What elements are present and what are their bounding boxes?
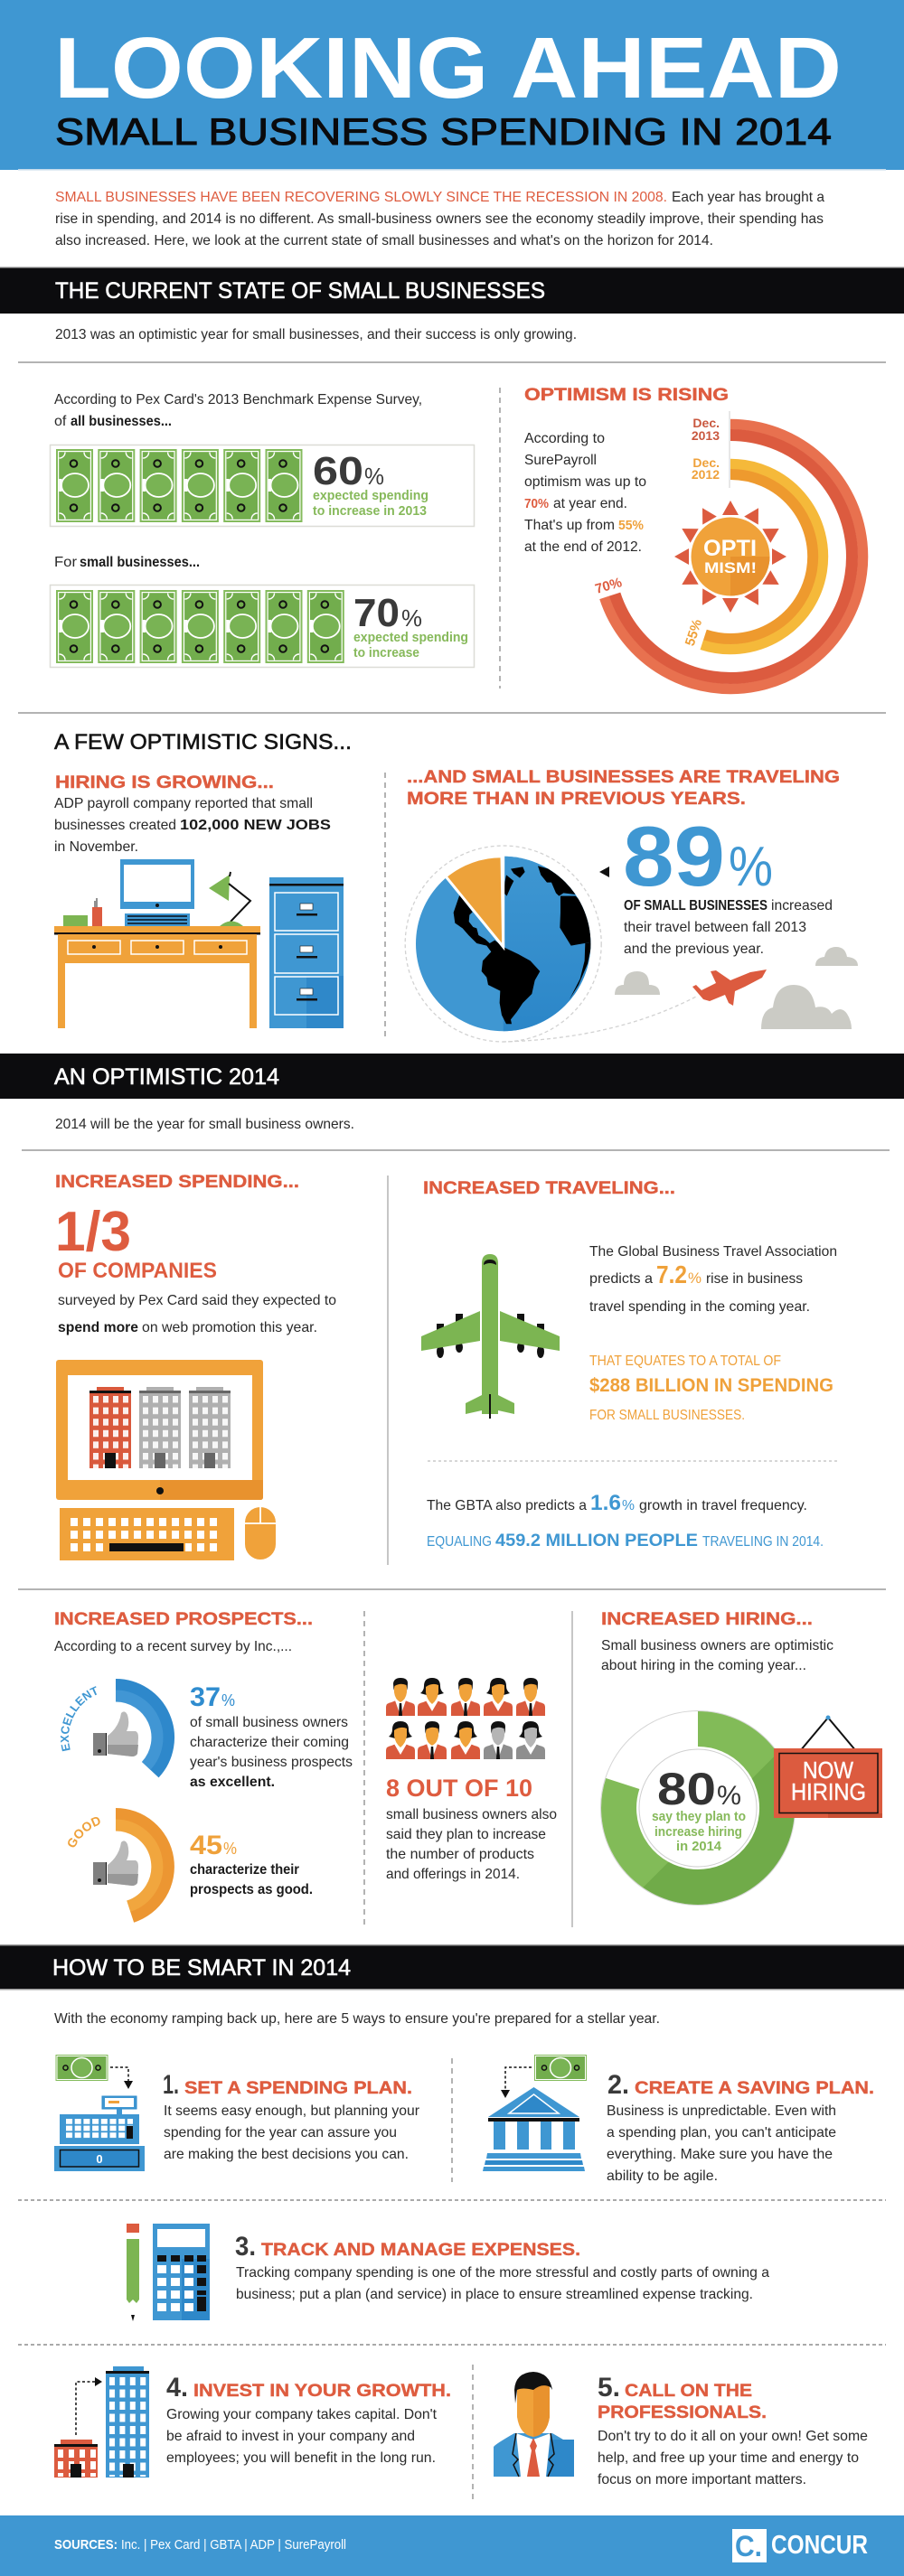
- stat: 45 percent: 45: [190, 1831, 222, 1860]
- stat: 37 percent: characterize their coming: [190, 1735, 349, 1750]
- tip 2: saving plan: everything. Make sure you have the: [607, 2147, 833, 2162]
- panel: increased spending: spend more: [58, 1320, 138, 1335]
- chart: 80 percent donut: increase hiring: [654, 1824, 742, 1840]
- text block: at year end.: [553, 496, 627, 511]
- tip 2: saving plan: ability to be agile.: [607, 2169, 718, 2184]
- panel: 8 out of 10: and offerings in 2014.: [386, 1867, 520, 1882]
- tip 2: saving plan: CREATE A SAVING PLAN.: [635, 2079, 874, 2098]
- panel: small businesses 70 percent: For: [54, 555, 78, 570]
- tip 1: spending plan: SET A SPENDING PLAN.: [184, 2079, 412, 2098]
- header banner: [0, 0, 904, 170]
- panel: all businesses 60 percent: %: [364, 463, 384, 490]
- chart: excellent arc: EXCELLENT: [60, 1686, 97, 1751]
- tip 5: call on professionals: Don't try to do it all on your own! Get some: [598, 2429, 868, 2444]
- panel: all businesses 60 percent: all businesses...: [71, 414, 172, 429]
- text block: at the end of 2012.: [524, 539, 642, 555]
- section intro text: 2013 was an optimistic year for small businesses, and their success is only growing.: [55, 327, 577, 342]
- panel: increased spending: INCREASED SPENDING...: [55, 1173, 299, 1192]
- panel: all businesses 60 percent: 60: [313, 449, 363, 493]
- tip 4: invest in growth: Growing your company takes capital. Don't: [166, 2407, 438, 2422]
- text block: GBTA frequency: TRAVELING IN 2014.: [702, 1534, 824, 1550]
- tip 2: saving plan: a spending plan, you can't anticipate: [607, 2125, 836, 2140]
- text block: GBTA frequency: The GBTA also predicts a: [427, 1498, 587, 1513]
- icon: red airplane: [692, 970, 767, 1006]
- panel: increased prospects: According to a recent survey by Inc.,...: [54, 1639, 292, 1654]
- text block: GBTA prediction: rise in business: [706, 1271, 803, 1287]
- text block: [524, 431, 646, 555]
- panel: small businesses 70 percent: to increase: [353, 645, 419, 660]
- icon: optimism sun: [674, 501, 786, 613]
- icon: now hiring sign: NOW: [803, 1756, 853, 1784]
- text block: GBTA frequency: %: [622, 1498, 635, 1513]
- heading: OPTIMISM IS RISING: [524, 386, 729, 405]
- panel: optimism is rising: 2013: [692, 428, 720, 443]
- tip 3: track expenses: business; put a plan (and service) in place to ensure streamlined expense tracking.: [236, 2287, 753, 2302]
- panel: increased hiring: [600, 1610, 882, 1905]
- subtitle: SMALL BUSINESS SPENDING IN 2014: [55, 110, 832, 153]
- text block: optimism was up to: [524, 474, 646, 490]
- text block: GBTA frequency: EQUALING: [427, 1534, 492, 1550]
- chart: good arc: [68, 1808, 174, 1923]
- icon: growing buildings: [54, 2366, 149, 2478]
- tip 3: track expenses: TRACK AND MANAGE EXPENSES.: [261, 2241, 580, 2260]
- intro paragraph: Each year has brought a: [672, 190, 824, 205]
- panel: small businesses 70 percent: 70: [353, 591, 400, 635]
- chart: excellent arc: [60, 1679, 175, 1778]
- text block: GBTA prediction: travel spending in the coming year.: [589, 1299, 810, 1315]
- logo: concur: CONCUR: [771, 2531, 868, 2560]
- stat: 89 percent: [623, 809, 773, 904]
- icon: cash register: 0: [96, 2152, 103, 2166]
- panel: small businesses 70 percent: small businesses...: [80, 555, 200, 570]
- icon: now hiring sign: HIRING: [791, 1778, 866, 1805]
- panel: small businesses 70 percent: %: [401, 604, 422, 632]
- chart: 80 percent donut: %: [717, 1781, 741, 1811]
- panel: increased hiring: about hiring in the coming year...: [601, 1658, 806, 1673]
- panel: optimism is rising: 2012: [692, 467, 720, 482]
- tip 2: saving plan: Business is unpredictable. Even with: [607, 2103, 836, 2119]
- stat: 37 percent: %: [221, 1691, 235, 1710]
- stat: 37 percent: as excellent.: [190, 1775, 275, 1790]
- icon: businessman: [494, 2372, 574, 2477]
- tip 5: call on professionals: PROFESSIONALS.: [598, 2403, 767, 2422]
- tip 2: saving plan: 2.: [607, 2070, 629, 2100]
- panel: 8 out of 10: said they plan to increase: [386, 1827, 546, 1842]
- tip 4: invest in growth: 4.: [166, 2373, 188, 2403]
- intro paragraph: also increased. Here, we look at the current state of small businesses and what's on the horizon for 2014.: [55, 233, 713, 248]
- panel: increased hiring: INCREASED HIRING...: [601, 1610, 813, 1629]
- tip 5: call on professionals: [494, 2372, 868, 2487]
- tip 1: spending plan: spending for the year can assure you: [164, 2125, 397, 2140]
- text block: GBTA frequency: growth in travel frequency.: [639, 1498, 807, 1513]
- panel: optimism is rising: Dec.: [692, 416, 720, 430]
- intro paragraph: SMALL BUSINESSES HAVE BEEN RECOVERING SLOWLY SINCE THE RECESSION IN 2008.: [55, 190, 667, 205]
- intro paragraph: rise in spending, and 2014 is no different. As small-business owners see the economy steadily improve, their spending has: [55, 211, 824, 227]
- tip 2: saving plan: [483, 2055, 874, 2184]
- stat: 45 percent: %: [223, 1840, 237, 1858]
- tip 5: call on professionals: 5.: [598, 2373, 620, 2403]
- stat: 37 percent: 37: [190, 1682, 221, 1712]
- chart: 80 percent donut: 80: [657, 1764, 716, 1814]
- heading: a few optimistic signs: A FEW OPTIMISTIC SIGNS...: [54, 730, 352, 754]
- panel: 8 out of 10: the number of products: [386, 1847, 534, 1862]
- icon: office desk: [54, 859, 260, 1028]
- text block: GBTA prediction: The Global Business Travel Association: [589, 1244, 837, 1260]
- section intro text: With the economy ramping back up, here are 5 ways to ensure you're prepared for a stellar year.: [54, 2011, 660, 2027]
- chart: 80 percent donut: say they plan to: [652, 1809, 746, 1824]
- panel: hiring is growing: HIRING IS GROWING...: [55, 773, 274, 792]
- stat: 89 percent: %: [729, 836, 773, 898]
- text block: GBTA prediction: %: [688, 1269, 702, 1287]
- icon: computer with buildings: [56, 1360, 276, 1560]
- text block: [624, 898, 833, 957]
- panel: small businesses 70 percent: expected spending: [353, 630, 468, 645]
- text block: GBTA prediction: [589, 1244, 837, 1423]
- panel: increased prospects: [54, 1610, 353, 1923]
- panel: increased spending: [55, 1173, 336, 1560]
- text block: increased: [771, 898, 833, 913]
- panel: traveling more: MORE THAN IN PREVIOUS YEARS.: [407, 790, 746, 809]
- panel: all businesses 60 percent: [51, 392, 474, 526]
- text block: According to: [524, 431, 605, 446]
- panel: all businesses 60 percent: expected spending: [313, 488, 428, 503]
- icon: money bills seven: [56, 590, 344, 663]
- tip 3: track expenses: Tracking company spending is one of the more stressful and costly parts of owning a: [236, 2265, 769, 2281]
- chart: globe pie 89 percent: [405, 846, 698, 1042]
- icon: green airplane: [421, 1254, 560, 1419]
- tip 5: call on professionals: help, and free up your time and energy to: [598, 2450, 859, 2466]
- icon: clouds: [615, 947, 858, 1029]
- panel: hiring is growing: in November.: [54, 839, 138, 855]
- text block: GBTA prediction: $288 BILLION IN SPENDING: [589, 1375, 833, 1396]
- text block: GBTA frequency: 1.6: [590, 1491, 621, 1515]
- panel: small businesses 70 percent: [51, 555, 474, 667]
- text block: and the previous year.: [624, 941, 764, 957]
- logo: concur: [732, 2529, 868, 2562]
- icon: optimism sun: MISM!: [704, 559, 757, 576]
- text block: GBTA prediction: 7.2: [656, 1260, 687, 1288]
- icon: people grid: [386, 1678, 545, 1759]
- chart: 70 percent ring: [605, 425, 863, 688]
- panel: hiring is growing: [54, 773, 344, 1028]
- icon: bank: [483, 2055, 587, 2171]
- text block: GBTA prediction: predicts a: [589, 1271, 653, 1287]
- text block: SurePayroll: [524, 453, 597, 468]
- text block: GBTA frequency: [427, 1491, 824, 1550]
- panel: increased spending: surveyed by Pex Card said they expected to: [58, 1293, 336, 1308]
- icon: money bills six: [56, 449, 302, 522]
- stat: 89 percent: 89: [623, 809, 725, 904]
- panel: hiring is growing: ADP payroll company reported that small: [54, 796, 313, 811]
- intro paragraph: [55, 190, 824, 248]
- text block: 70%: [524, 496, 549, 511]
- panel: all businesses 60 percent: of: [54, 414, 67, 429]
- panel: 8 out of 10: 8 OUT OF 10: [386, 1775, 532, 1802]
- tip 4: invest in growth: [54, 2366, 451, 2478]
- panel: hiring is growing: 102,000 NEW JOBS: [180, 818, 331, 833]
- panel: increased spending: OF COMPANIES: [58, 1259, 217, 1283]
- tip 1: spending plan: 1.: [163, 2070, 179, 2100]
- stat: 37 percent: of small business owners: [190, 1715, 348, 1730]
- section band: how to be smart: HOW TO BE SMART IN 2014: [52, 1955, 351, 1981]
- tip 3: track expenses: 3.: [235, 2232, 256, 2262]
- panel: hiring is growing: businesses created: [54, 818, 176, 833]
- logo: concur: C.: [735, 2530, 762, 2562]
- text block: GBTA frequency: 459.2 MILLION PEOPLE: [495, 1532, 698, 1550]
- panel: 8 out of 10: small business owners also: [386, 1807, 557, 1822]
- panel: increased hiring: Small business owners are optimistic: [601, 1638, 833, 1653]
- stat: 45 percent: characterize their: [190, 1862, 299, 1878]
- chart: 80 percent donut: [600, 1711, 796, 1905]
- section band: an optimistic 2014: AN OPTIMISTIC 2014: [54, 1064, 279, 1090]
- sources: SOURCES:: [54, 2537, 118, 2553]
- text block: 55%: [618, 518, 644, 533]
- arrow pointer: [599, 866, 609, 877]
- stat: 37 percent: year's business prospects: [190, 1755, 353, 1770]
- stat: 45 percent: [190, 1831, 313, 1897]
- section band: an optimistic 2014: [0, 1054, 904, 1099]
- tip 4: invest in growth: INVEST IN YOUR GROWTH.: [193, 2382, 451, 2401]
- panel: traveling more: [405, 768, 858, 1042]
- chart: good arc: GOOD: [68, 1817, 100, 1847]
- section band: how to be smart: [0, 1944, 904, 1990]
- stat: one third: 1/3: [55, 1201, 131, 1263]
- panel: optimism is rising: [524, 386, 863, 688]
- footer: [0, 2515, 904, 2576]
- section intro text: 2014 will be the year for small business owners.: [55, 1117, 354, 1132]
- panel: optimism is rising: Dec.: [692, 455, 720, 470]
- chart: 55 percent ring: [702, 464, 823, 649]
- text block: That's up from: [524, 518, 615, 533]
- text block: their travel between fall 2013: [624, 920, 806, 935]
- tip 4: invest in growth: be afraid to invest in your company and: [166, 2429, 415, 2444]
- panel: increased traveling: INCREASED TRAVELING...: [423, 1179, 675, 1198]
- panel: 8 out of 10: [386, 1678, 557, 1882]
- stat: 45 percent: prospects as good.: [190, 1882, 313, 1897]
- panel: increased traveling: [421, 1179, 837, 1550]
- tip 1: spending plan: are making the best decisions you can.: [164, 2147, 409, 2162]
- tip 5: call on professionals: CALL ON THE: [625, 2382, 752, 2401]
- panel: all businesses 60 percent: According to Pex Card's 2013 Benchmark Expense Survey,: [54, 392, 422, 407]
- title: LOOKING AHEAD: [54, 20, 842, 117]
- panel: optimism is rising: 70%: [593, 575, 624, 597]
- section band: current state: THE CURRENT STATE OF SMALL BUSINESSES: [55, 278, 545, 304]
- tip 1: spending plan: It seems easy enough, but planning your: [164, 2103, 420, 2119]
- text block: GBTA prediction: FOR SMALL BUSINESSES.: [589, 1408, 745, 1423]
- tip 5: call on professionals: focus on more important matters.: [598, 2472, 806, 2487]
- icon: now hiring sign: [774, 1715, 882, 1818]
- tip 3: track expenses: [127, 2224, 769, 2321]
- icon: optimism sun: OPTI: [703, 536, 757, 561]
- panel: increased spending: on web promotion this year.: [142, 1320, 317, 1335]
- panel: optimism is rising: 55%: [683, 617, 705, 648]
- tip 1: spending plan: [54, 2055, 420, 2171]
- text block: GBTA prediction: THAT EQUATES TO A TOTAL OF: [589, 1354, 781, 1369]
- panel: traveling more: ...AND SMALL BUSINESSES ARE TRAVELING: [407, 768, 840, 787]
- chart: 80 percent donut: in 2014: [676, 1839, 722, 1854]
- icon: cash register: [54, 2055, 145, 2171]
- panel: increased prospects: INCREASED PROSPECTS...: [54, 1610, 313, 1629]
- icon: pencil and calculator: [127, 2224, 210, 2321]
- tip 4: invest in growth: employees; you will benefit in the long run.: [166, 2450, 436, 2466]
- text block: OF SMALL BUSINESSES: [624, 898, 767, 913]
- stat: 37 percent: [190, 1682, 353, 1790]
- sources: [54, 2537, 346, 2553]
- panel: all businesses 60 percent: to increase in 2013: [313, 503, 427, 519]
- sources: Inc. | Pex Card | GBTA | ADP | SurePayroll: [121, 2537, 346, 2553]
- icon: filing cabinet: [269, 877, 344, 1028]
- section band: current state: [0, 267, 904, 314]
